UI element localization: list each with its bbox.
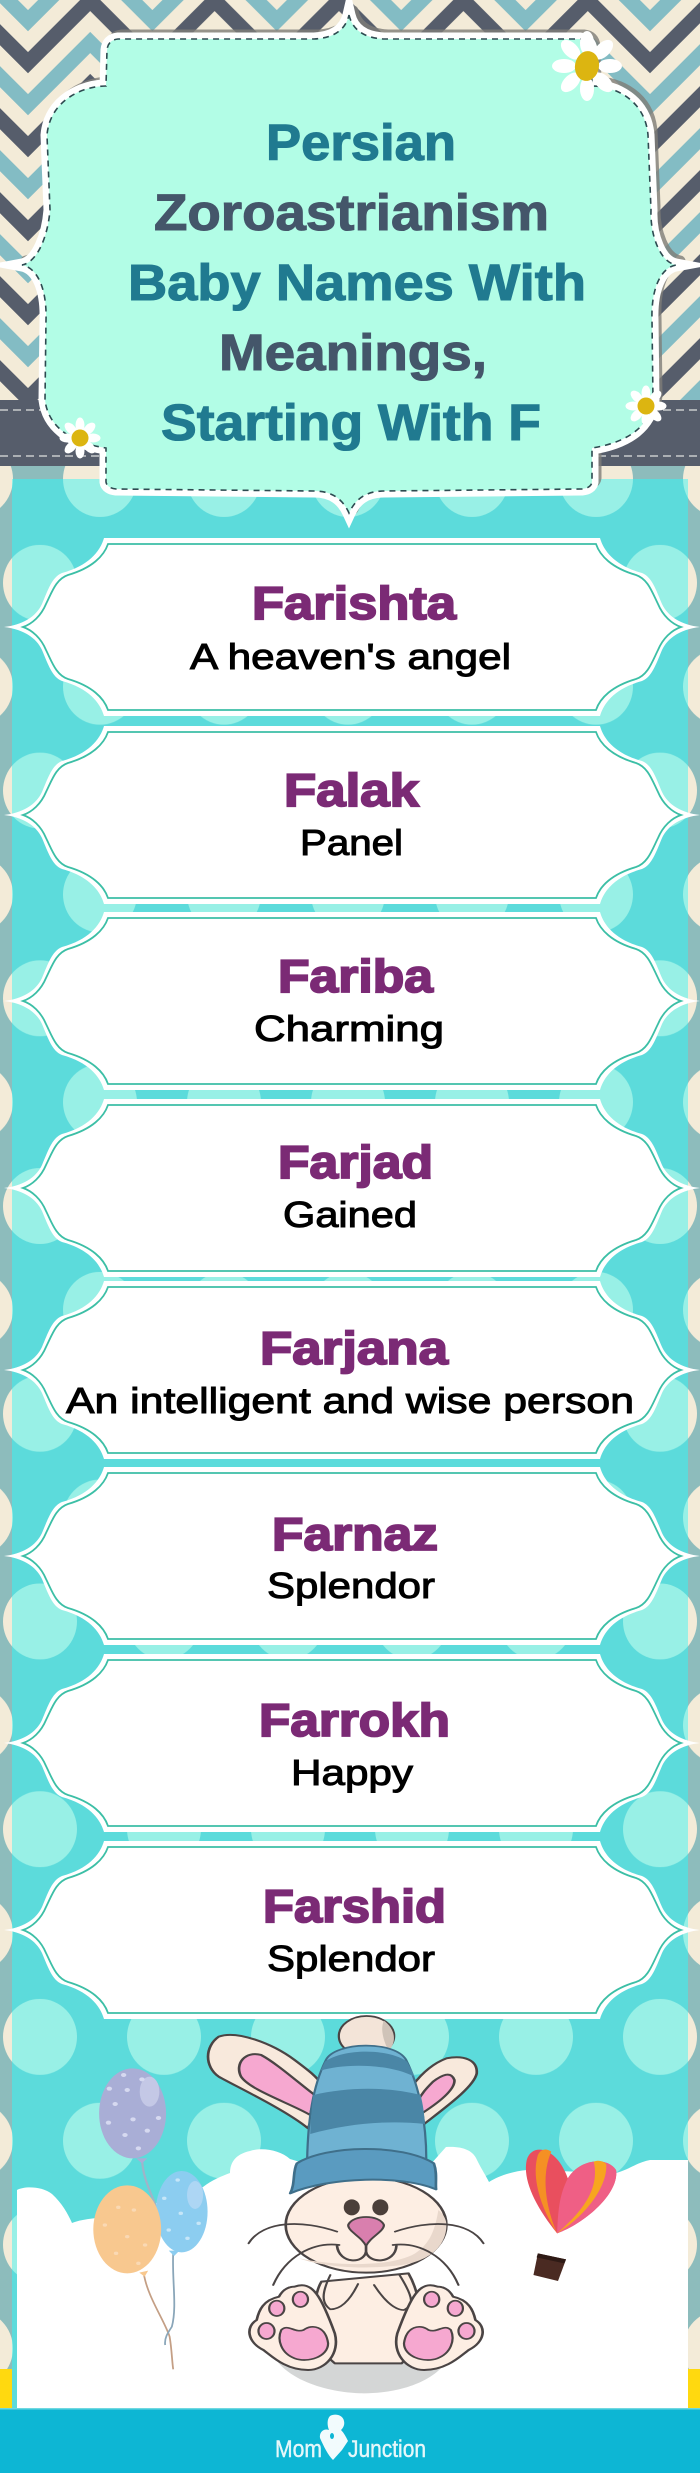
polka dot background xyxy=(0,466,700,2416)
panel: Farshid card: Farshid xyxy=(263,1880,446,1932)
chevron header background xyxy=(0,0,700,402)
panel: Farrokh card: Happy xyxy=(291,1752,413,1793)
icon: daisy left xyxy=(60,418,100,458)
panel: title plaque xyxy=(22,11,680,513)
icon: daisy right xyxy=(626,386,666,426)
panel: Farnaz card: Farnaz xyxy=(272,1508,438,1560)
title: Baby Names With xyxy=(128,254,586,311)
illustration: bunny with striped hat xyxy=(208,2016,483,2393)
illustration: heart hot air balloon xyxy=(526,2149,616,2281)
panel: Farshid card xyxy=(4,1841,700,2019)
panel: Farjad card: Gained xyxy=(283,1194,417,1235)
panel: Falak card: Panel xyxy=(300,822,403,863)
title: Meanings, xyxy=(219,324,487,381)
panel: Farrokh card xyxy=(4,1654,700,1832)
panel: Farjana card: An intelligent and wise person xyxy=(66,1380,634,1421)
panel: Farjad card: Farjad xyxy=(278,1136,433,1188)
ribbon band xyxy=(0,400,700,466)
title: Starting With F xyxy=(161,394,541,451)
title: Zoroastrianism xyxy=(154,184,549,241)
logo: MomJunction: Mom xyxy=(275,2436,322,2463)
icon: daisy top right xyxy=(552,31,622,101)
footer bar xyxy=(0,2408,700,2473)
panel: Fariba card xyxy=(4,912,700,1090)
panel: Falak card: Falak xyxy=(284,764,419,816)
logo: MomJunction: Junction xyxy=(348,2436,426,2463)
title: Persian xyxy=(266,114,456,171)
panel: Farnaz card xyxy=(4,1467,700,1645)
panel: Fariba card: Charming xyxy=(254,1008,444,1049)
title xyxy=(128,114,586,451)
panel: Farjana card: Farjana xyxy=(260,1322,448,1374)
panel: Farishta card: A heaven's angel xyxy=(190,636,511,677)
illustration: balloons xyxy=(93,2068,208,2369)
panel: Farishta card: Farishta xyxy=(252,577,456,629)
white clouds xyxy=(17,2147,688,2408)
panel: Farjad card xyxy=(4,1099,700,1277)
panel: Farishta card xyxy=(4,538,700,716)
panel: Farnaz card: Splendor xyxy=(267,1565,435,1606)
panel: Farrokh card: Farrokh xyxy=(259,1694,450,1746)
panel: Farjana card xyxy=(4,1281,700,1459)
panel: Farshid card: Splendor xyxy=(267,1938,435,1979)
panel: Fariba card: Fariba xyxy=(278,950,433,1002)
panel: Falak card xyxy=(4,726,700,904)
logo: MomJunction xyxy=(275,2415,426,2463)
